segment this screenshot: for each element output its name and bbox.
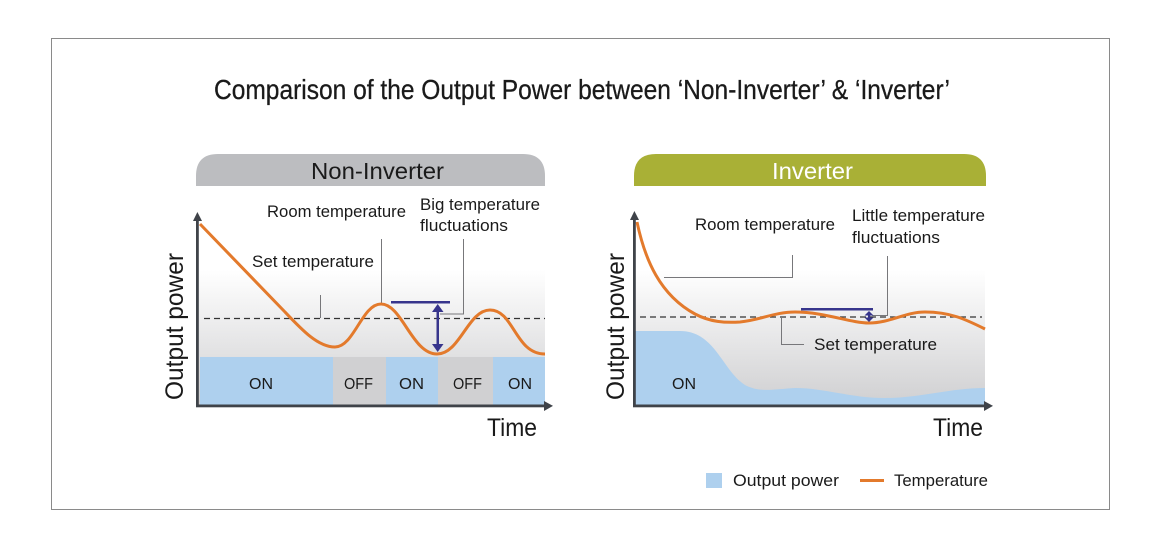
temperature curve xyxy=(200,224,545,354)
label: set temperature: Set temperature xyxy=(252,253,374,271)
ON label: ON xyxy=(672,376,696,393)
outer frame xyxy=(52,38,1110,510)
leader lines xyxy=(664,255,888,344)
title: Comparison of the Output Power between ‘Non-Inverter’ & ‘Inverter’ xyxy=(214,74,950,105)
axes xyxy=(630,211,993,411)
on/off bars: OFF xyxy=(344,376,373,393)
x axis label: Time xyxy=(933,414,983,442)
axes xyxy=(193,212,553,411)
label: little temperature fluctuations: fluctuations xyxy=(852,229,940,247)
on/off bars xyxy=(200,357,545,405)
set temperature dashed line xyxy=(640,316,982,318)
fluctuation marker xyxy=(801,308,874,322)
legend: temperature: Temperature xyxy=(894,472,988,490)
chart background xyxy=(198,270,545,406)
on/off bars: ON xyxy=(508,376,532,393)
header: Inverter xyxy=(634,154,986,186)
panel: inverter chart xyxy=(602,154,993,442)
temperature curve xyxy=(637,222,985,329)
label: big temperature fluctuations: fluctuations xyxy=(420,217,508,235)
y axis label: Output power xyxy=(602,253,630,400)
panel: non-inverter chart xyxy=(161,154,553,442)
output power area xyxy=(635,331,985,405)
on/off bars: OFF xyxy=(453,376,482,393)
header: Non-Inverter xyxy=(196,154,545,186)
label: room temperature: Room temperature xyxy=(695,216,835,234)
leader lines xyxy=(320,239,464,318)
label: room temperature: Room temperature xyxy=(267,203,406,221)
on/off bars: ON xyxy=(249,376,273,393)
label: little temperature fluctuations: Little temperature xyxy=(852,207,985,225)
chart background xyxy=(635,270,985,406)
x axis label: Time xyxy=(487,414,537,442)
header: Inverter: Inverter xyxy=(772,158,853,184)
label: set temperature: Set temperature xyxy=(814,336,937,354)
label: big temperature fluctuations: Big temperature xyxy=(420,196,540,214)
on/off bars: ON xyxy=(399,376,424,393)
legend: output power: Output power xyxy=(733,472,840,490)
legend xyxy=(706,472,988,490)
set temperature dashed line xyxy=(204,318,545,320)
fluctuation marker xyxy=(391,301,450,352)
y axis label: Output power xyxy=(161,253,189,400)
header: Non-Inverter: Non-Inverter xyxy=(311,158,444,184)
